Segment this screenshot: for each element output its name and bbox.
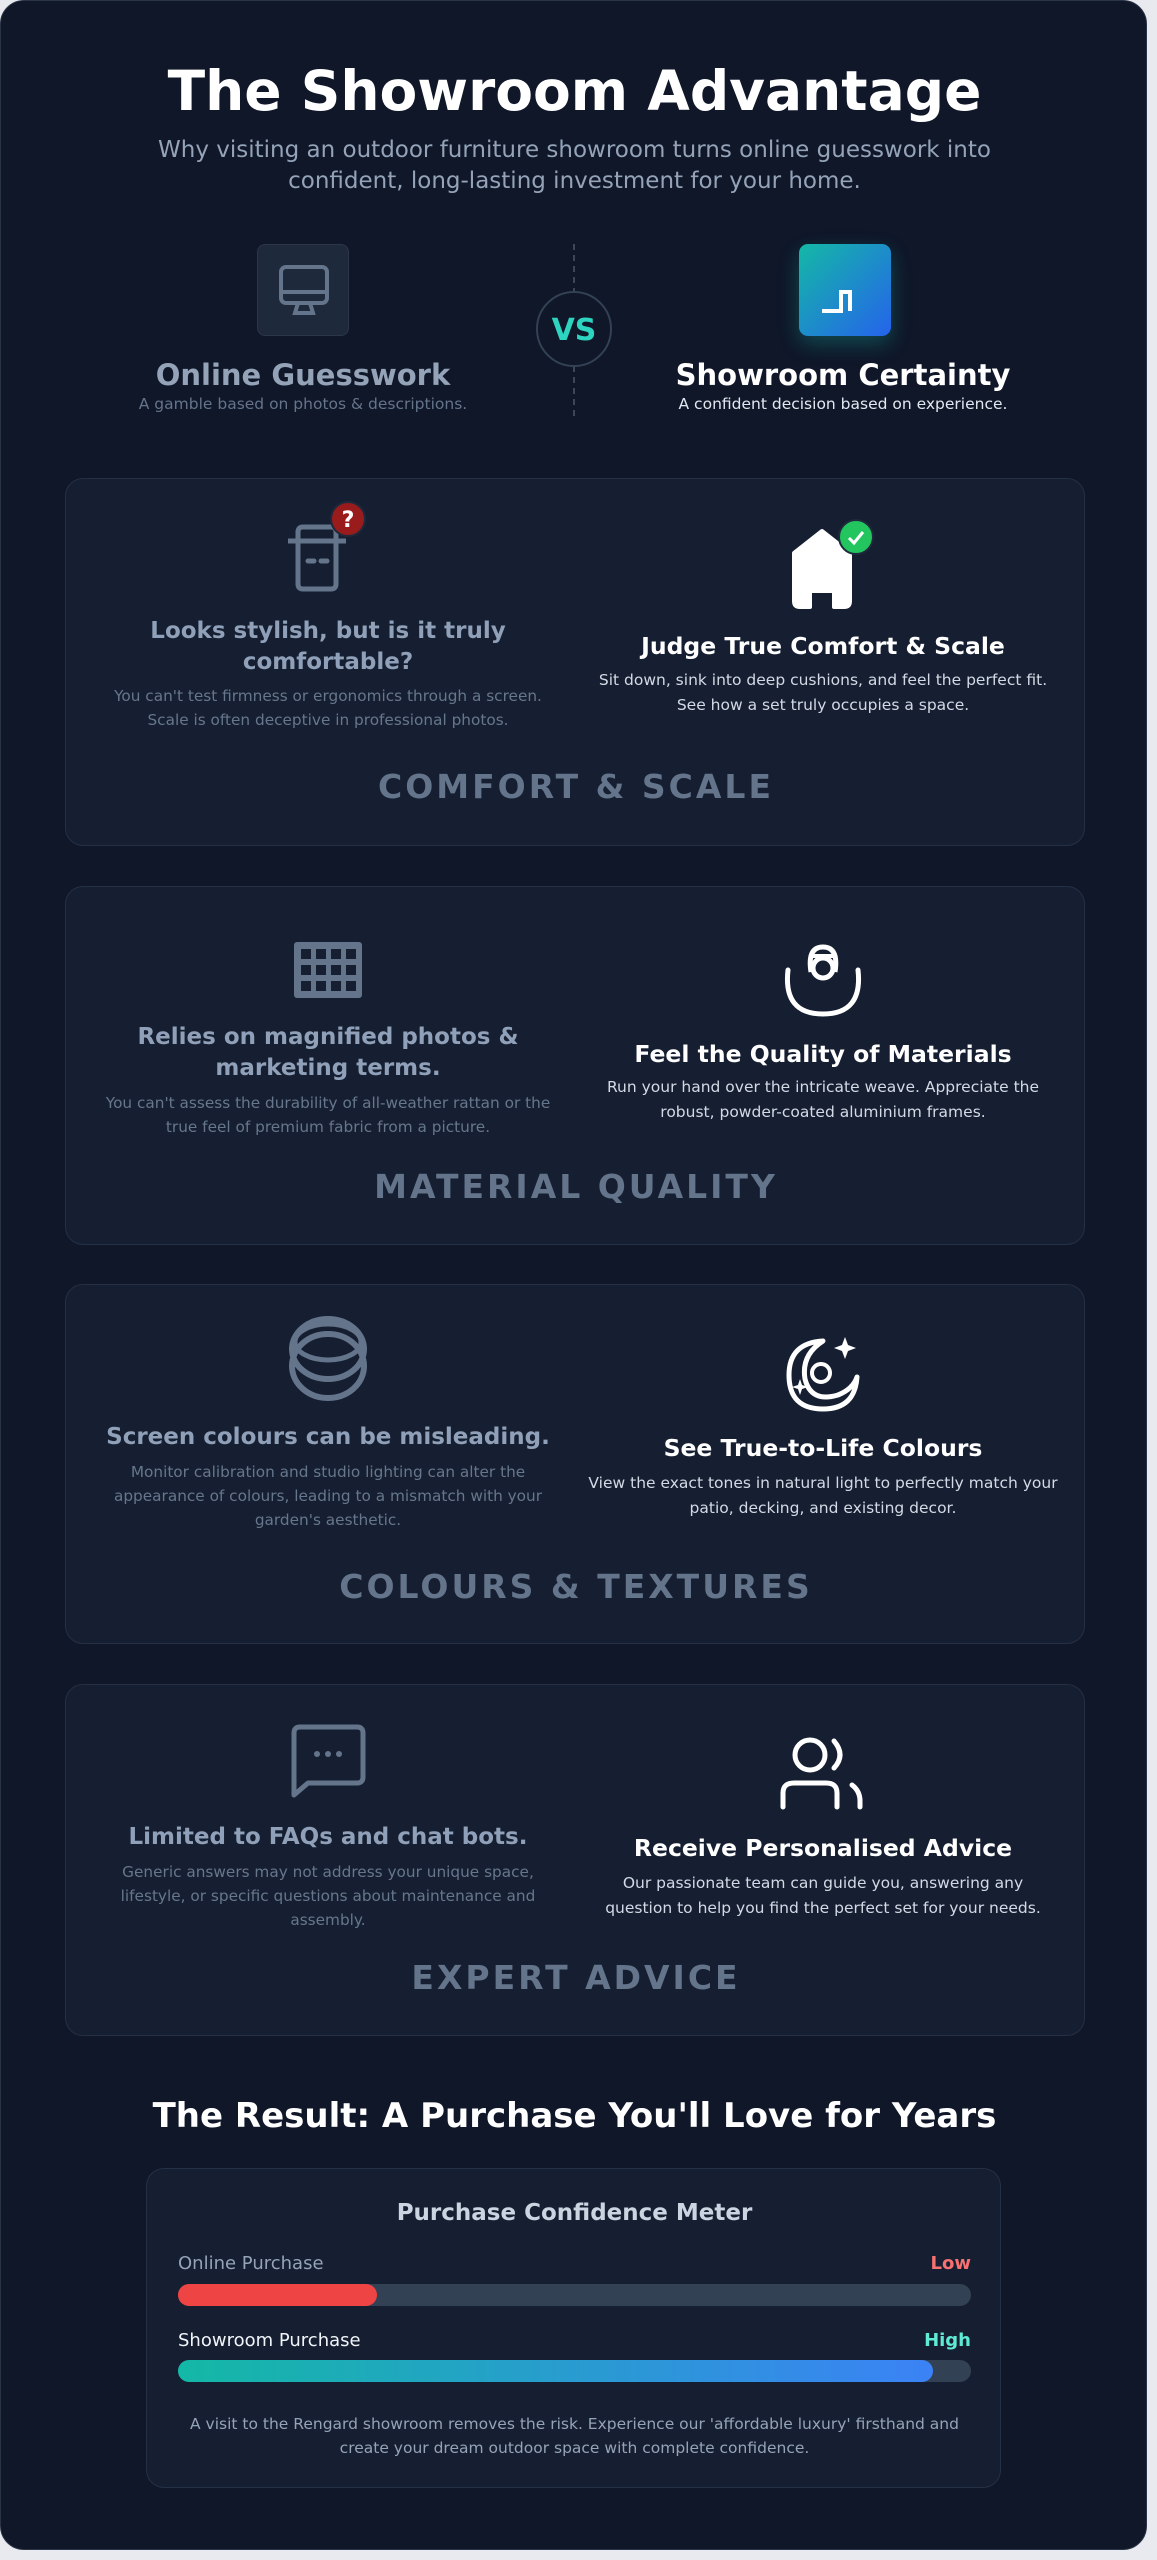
right desc: Our passionate team can guide you, answering any question to help you find the perfect set for your needs. — [605, 1874, 1041, 1917]
category label: COLOURS & TEXTURES — [339, 1567, 813, 1606]
category label: MATERIAL QUALITY — [374, 1167, 778, 1206]
panel: colours & textures — [65, 1284, 1085, 1644]
icon: hand/touch — [784, 944, 862, 1016]
icon: users — [780, 1738, 862, 1810]
online guesswork sub: A gamble based on photos & descriptions. — [139, 395, 467, 413]
left desc: Generic answers may not address your unique space, lifestyle, or specific questions about maintenance and assembly. — [121, 1863, 535, 1929]
showroom purchase row — [178, 2330, 971, 2382]
showroom purchase row: High — [924, 2330, 971, 2351]
online purchase row — [178, 2253, 971, 2306]
right heading: Feel the Quality of Materials — [634, 1040, 1012, 1068]
icon: monitor box — [257, 244, 349, 336]
result heading: The Result: A Purchase You'll Love for Years — [153, 2096, 996, 2136]
icon: house with check — [792, 519, 874, 609]
category label: COMFORT & SCALE — [378, 767, 774, 806]
showroom certainty sub: A confident decision based on experience. — [679, 395, 1007, 413]
right heading: See True-to-Life Colours — [664, 1434, 982, 1462]
online guesswork heading: Online Guesswork — [156, 358, 450, 392]
panel: expert advice — [65, 1684, 1085, 2036]
icon: chat bubble — [292, 1724, 366, 1798]
right desc: View the exact tones in natural light to perfectly match your patio, decking, and existing decor. — [588, 1474, 1058, 1517]
left heading: Screen colours can be misleading. — [106, 1424, 550, 1450]
divider with VS: VS — [552, 313, 596, 348]
confidence meter panel — [146, 2168, 1001, 2488]
left desc: Monitor calibration and studio lighting can alter the appearance of colours, leading to a mismatch with your garden's aesthetic. — [114, 1463, 542, 1529]
icon: overlapping rings — [289, 1316, 367, 1401]
right heading: Receive Personalised Advice — [634, 1834, 1012, 1862]
panel: material quality — [65, 886, 1085, 1245]
title: The Showroom Advantage — [168, 59, 981, 123]
right desc: Sit down, sink into deep cushions, and feel the perfect fit. See how a set truly occupies a space. — [599, 671, 1047, 714]
category label: EXPERT ADVICE — [411, 1958, 741, 1997]
panel: comfort & scale — [65, 478, 1085, 846]
subtitle: Why visiting an outdoor furniture showroom turns online guesswork into confident, long-lasting investment for your home. — [158, 137, 991, 194]
icon: chair with question — [288, 501, 366, 592]
icon: grid — [294, 942, 362, 998]
icon: showroom box — [799, 244, 891, 336]
left desc: You can't assess the durability of all-weather rattan or the true feel of premium fabric from a picture. — [106, 1094, 550, 1136]
icon: chair with question: ? — [342, 508, 354, 533]
left heading: Relies on magnified photos & marketing terms. — [137, 1024, 519, 1081]
meter title: Purchase Confidence Meter — [397, 2200, 752, 2226]
footer text: A visit to the Rengard showroom removes the risk. Experience our 'affordable luxury' firsthand and create your dream outdoor space with complete confidence. — [190, 2415, 959, 2457]
right heading: Judge True Comfort & Scale — [641, 632, 1005, 660]
left heading: Looks stylish, but is it truly comfortable? — [150, 618, 506, 675]
showroom purchase row: Showroom Purchase — [178, 2330, 361, 2351]
divider with VS — [536, 244, 612, 416]
online purchase row: Low — [931, 2253, 971, 2274]
online purchase row: Online Purchase — [178, 2253, 324, 2274]
showroom certainty heading: Showroom Certainty — [676, 358, 1010, 392]
right desc: Run your hand over the intricate weave. Appreciate the robust, powder-coated aluminium frames. — [607, 1078, 1039, 1121]
left heading: Limited to FAQs and chat bots. — [129, 1824, 527, 1850]
left desc: You can't test firmness or ergonomics through a screen. Scale is often deceptive in professional photos. — [114, 687, 542, 729]
icon: moon with sparkles — [786, 1337, 860, 1412]
